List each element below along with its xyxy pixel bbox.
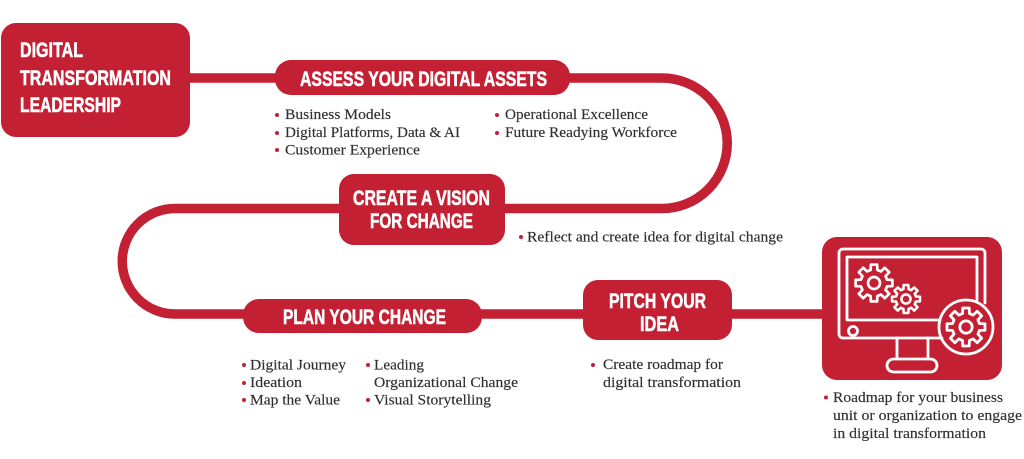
text: create roadmap: Create roadmap for [603, 357, 723, 373]
text: create roadmap: digital transformation [603, 375, 742, 391]
step: create a vision for change: FOR CHANGE [370, 210, 473, 233]
step: plan your change: PLAN YOUR CHANGE [283, 306, 446, 329]
list: plan right column: Organizational Change [374, 375, 518, 391]
list: plan right column: Visual Storytelling [374, 392, 492, 408]
list: assess right column: Operational Excellence [505, 107, 648, 123]
list: plan left column: Ideation [250, 375, 303, 391]
step: create a vision for change: CREATE A VISION [353, 187, 490, 210]
text: roadmap for your business: in digital transformation [833, 426, 987, 442]
text: roadmap for your business: Roadmap for your business [833, 390, 1003, 406]
text: reflect: Reflect and create idea for digital change [527, 230, 783, 246]
panel: digital transformation leadership [1, 23, 190, 137]
step: pitch your idea: PITCH YOUR [609, 290, 706, 313]
panel: digital transformation leadership: DIGITAL [20, 39, 83, 62]
text: create roadmap [591, 357, 742, 391]
panel: monitor icon [822, 237, 1002, 380]
panel: digital transformation leadership: TRANSFORMATION [20, 67, 171, 90]
list: assess right column [495, 107, 677, 141]
icon: monitor with gears [839, 249, 993, 372]
panel: digital transformation leadership: LEADERSHIP [20, 94, 121, 117]
list: plan right column: Leading [374, 358, 424, 374]
list: assess left column [275, 107, 460, 158]
list: assess left column: Digital Platforms, Data & AI [285, 125, 460, 141]
step: plan your change [243, 299, 482, 333]
step: pitch your idea [583, 280, 732, 340]
connector path [122, 78, 824, 314]
text: roadmap for your business [824, 390, 1022, 442]
list: plan left column [242, 358, 347, 408]
step: assess your digital assets [275, 60, 570, 95]
list: assess left column: Business Models [285, 107, 391, 123]
list: assess left column: Customer Experience [285, 142, 420, 158]
step: pitch your idea: IDEA [640, 313, 679, 336]
text: roadmap for your business: unit or organization to engage [833, 408, 1022, 424]
list: plan left column: Map the Value [250, 392, 340, 408]
list: plan right column [366, 358, 518, 408]
step: create a vision for change [339, 174, 505, 245]
step: assess your digital assets: ASSESS YOUR DIGITAL ASSETS [300, 68, 547, 91]
list: assess right column: Future Readying Workforce [505, 125, 677, 141]
list: plan left column: Digital Journey [250, 358, 347, 374]
